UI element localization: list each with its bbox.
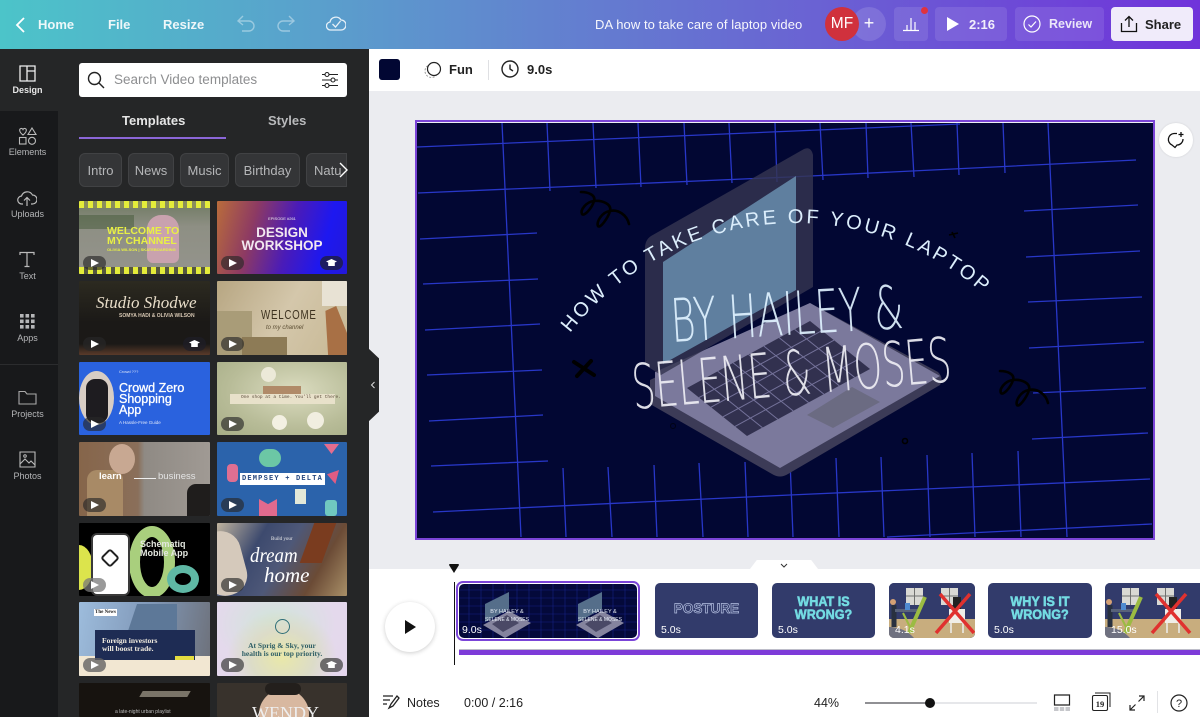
- credits line one: BY HAILEY &: [669, 273, 905, 357]
- clip duration: 15.0s: [1111, 624, 1137, 636]
- playhead line: [454, 582, 455, 665]
- template: foreign investors news: The News: [95, 610, 116, 615]
- tab: styles: Styles: [268, 113, 306, 128]
- search box: [79, 63, 347, 97]
- active tab underline: [79, 137, 226, 139]
- rail divider: [0, 364, 58, 365]
- share text: Share: [1145, 17, 1181, 32]
- animation name: Fun: [449, 62, 473, 77]
- icon: help: [1170, 694, 1188, 712]
- template: learn business: learn: [99, 471, 122, 482]
- icon: grid view: [1054, 694, 1070, 711]
- icon: clock: [501, 60, 519, 78]
- chip: music: Music: [188, 163, 221, 178]
- clip title: WRONG?: [795, 606, 852, 622]
- notes label: Notes: [407, 696, 440, 710]
- template side panel: [58, 49, 369, 717]
- left icon rail: [0, 49, 58, 717]
- template: studio shodwe: Studio Shodwe: [96, 293, 197, 312]
- home link: Home: [38, 17, 74, 32]
- chip: music: [180, 153, 229, 187]
- chip: nature: Natu: [314, 163, 341, 178]
- clip duration: 9.0s: [462, 624, 482, 636]
- squiggle top left: [581, 192, 629, 227]
- mini laptop left: SELENE & MOSES: [485, 617, 530, 623]
- icon: chip scroll chevron: [340, 162, 348, 178]
- icon: folder: [18, 391, 37, 404]
- file menu: File: [108, 17, 130, 32]
- small marks: [670, 232, 958, 444]
- timeline clip: intro selected: [456, 581, 640, 641]
- icon: check circle: [1023, 15, 1041, 33]
- template: welcome to my channel: MY CHANNEL: [107, 235, 177, 247]
- template: studio shodwe: SOMYA HADI & OLIVIA WILSON: [119, 313, 195, 319]
- template: learn business: [79, 442, 210, 516]
- icon: filter sliders: [322, 72, 338, 88]
- label: text: Text: [19, 271, 36, 281]
- mini laptop left: [483, 592, 531, 638]
- label: projects: Projects: [11, 409, 44, 419]
- icon: pages count: [1092, 692, 1110, 711]
- template: crowd zero shopping app: Shopping: [119, 392, 172, 406]
- label: design: Design: [12, 85, 42, 95]
- icon: uploads: [17, 191, 37, 206]
- nav: uploads: [11, 191, 44, 219]
- icon: expand tab: [750, 560, 818, 569]
- template: build your dream home: Build your: [271, 537, 293, 542]
- laptop screen: [663, 176, 796, 364]
- template: welcome to my channel: OLIVIA WILSON | SKATEBOARDING: [107, 247, 176, 252]
- clip duration: 5.0s: [778, 624, 798, 636]
- icon: photo: [19, 452, 36, 468]
- template: foreign investors news: [79, 602, 210, 676]
- zoom percent: 44%: [814, 696, 839, 710]
- icon: animation: [424, 62, 442, 78]
- template: build your dream home: dream: [250, 543, 298, 567]
- icon: apps grid: [20, 314, 35, 329]
- icon: play: [947, 17, 959, 31]
- template: foreign investors news: will boost trade.: [102, 644, 153, 653]
- nav: apps: [17, 314, 38, 343]
- template: learn business: business: [158, 471, 196, 482]
- chip: news: [128, 153, 174, 187]
- template: studio shodwe: [79, 281, 210, 355]
- icon: back chevron: [16, 17, 25, 33]
- button: review: [1015, 7, 1104, 41]
- avatar MF: [825, 7, 859, 41]
- clip title: [794, 593, 852, 622]
- chip: news: News: [135, 163, 167, 178]
- scene illustration: [1105, 583, 1200, 638]
- clip duration: 5.0s: [994, 624, 1014, 636]
- button: add collaborator: +: [864, 13, 874, 33]
- template: build your dream home: home: [264, 563, 310, 587]
- credits line two: SELENE & MOSES: [629, 324, 954, 424]
- timeline panel: [369, 569, 1200, 717]
- timeline clip: desk scene long: [1105, 583, 1200, 638]
- object options bar: [369, 49, 1200, 91]
- scene illustration: [889, 583, 975, 638]
- colour swatch: [379, 59, 400, 80]
- icon: collapse chevron: [370, 382, 375, 388]
- button: play duration: [935, 7, 1007, 41]
- icon: help: ?: [1176, 698, 1182, 710]
- mini laptop left: BY HAILEY &: [490, 609, 524, 615]
- laptop lid: [645, 148, 813, 375]
- chip: intro: [79, 153, 122, 187]
- template: schematiq mobile app: Schematiq: [140, 539, 186, 549]
- template: schematiq mobile app: [79, 523, 210, 596]
- illustration: isometric laptop: [645, 148, 942, 476]
- icon: comment plus: [1168, 132, 1184, 148]
- template: crowd zero shopping app: Crowd Zero: [119, 381, 184, 395]
- tab: templates: Templates: [122, 113, 185, 128]
- duration text: 2:16: [969, 17, 995, 32]
- timeline clip: posture: [655, 583, 758, 638]
- duration divider: [488, 60, 489, 80]
- template: welcome collage: WELCOME: [261, 307, 317, 322]
- toolbar divider: [1157, 691, 1158, 713]
- template: dempsey and delta: DEMPSEY + DELTA: [242, 475, 323, 483]
- chip: birthday: Birthday: [244, 163, 291, 178]
- chip: nature: [306, 153, 347, 187]
- chip: birthday: [235, 153, 300, 187]
- clip title: WHAT IS: [797, 593, 850, 609]
- mini laptop right: [576, 592, 624, 638]
- add comment button: [1159, 123, 1193, 157]
- icon: fullscreen: [1129, 695, 1145, 711]
- template: wendy partial: [217, 683, 347, 717]
- chip: intro: Intro: [87, 163, 114, 178]
- intro clip frames: [459, 584, 637, 638]
- icon: magnifier: [88, 72, 104, 88]
- clip title: [993, 595, 1087, 621]
- template: sprig and sky: health is our top priority.: [242, 649, 322, 658]
- slide: how to take care of your laptop: [417, 123, 1153, 538]
- document title: DA how to take care of laptop video: [595, 17, 802, 32]
- duration value: 9.0s: [527, 62, 552, 77]
- button: analytics: [894, 7, 928, 41]
- template: welcome to my channel: WELCOME TO: [107, 225, 179, 237]
- template: schematiq mobile app: Mobile App: [140, 548, 188, 558]
- template: daisies shop: One shop at a time. You'll get there.: [241, 395, 341, 400]
- curved heading: HOW TO TAKE CARE OF YOUR LAPTOP: [560, 209, 989, 332]
- template: dempsey and delta: [217, 442, 347, 516]
- icon: expand chevron: [780, 564, 788, 568]
- nav: photos: [13, 452, 42, 481]
- icon: elements: [18, 127, 37, 145]
- mini laptop right: BY HAILEY &: [583, 609, 617, 615]
- nav: text: [19, 252, 36, 281]
- template: crowd zero shopping app: [79, 362, 210, 435]
- progress bar: [459, 650, 1200, 655]
- template: design workshop: DESIGN: [256, 225, 308, 240]
- avatar MF: MF: [831, 15, 853, 32]
- laptop base: [650, 303, 942, 476]
- clip duration: 4.1s: [895, 624, 915, 636]
- icon: bars: [903, 18, 919, 32]
- icon: play triangle: [405, 620, 416, 634]
- template: daisies shop: [217, 362, 347, 435]
- slider fill: [865, 702, 930, 704]
- template: design workshop: EPISODE #261: [268, 216, 296, 221]
- nav: elements: [9, 127, 46, 157]
- trackpad: [807, 387, 880, 428]
- template: design workshop: [217, 201, 347, 274]
- mini laptop right: SELENE & MOSES: [578, 617, 623, 623]
- timeline clip: desk scene: [889, 583, 975, 638]
- label: photos: Photos: [13, 471, 42, 481]
- icon: notes: [383, 695, 400, 710]
- notification dot: [921, 7, 928, 14]
- review text: Review: [1049, 17, 1092, 31]
- icon: text T: [19, 252, 35, 268]
- search placeholder: Search Video templates: [114, 72, 257, 87]
- blue grid lines: [417, 123, 1152, 537]
- slider track: [865, 702, 1037, 704]
- slide canvas with selection border: [415, 120, 1155, 540]
- template: sprig and sky: At Sprig & Sky, your: [248, 641, 316, 650]
- template: dark partial: a late-night urban playlist: [115, 709, 171, 715]
- slider knob: [925, 698, 935, 708]
- cross mark: [574, 361, 594, 376]
- template: welcome to my channel: [79, 201, 210, 274]
- clip title: WRONG?: [1011, 606, 1069, 622]
- clip title: WHY IS IT: [1010, 593, 1070, 609]
- template: crowd zero shopping app: A Hassle-Free Guide: [119, 420, 161, 425]
- template: build your dream home: [217, 523, 347, 596]
- label: apps: Apps: [17, 333, 38, 343]
- panel collapse handle: [369, 349, 379, 421]
- template: design workshop: WORKSHOP: [242, 238, 322, 252]
- clip duration: 5.0s: [661, 624, 681, 636]
- template: dark partial: [79, 683, 210, 717]
- top toolbar: [0, 0, 1200, 49]
- timeline clip: why is it wrong: [988, 583, 1092, 638]
- time readout: 0:00 / 2:16: [464, 696, 523, 710]
- squiggle right: [1000, 371, 1048, 406]
- template: welcome collage: to my channel: [266, 325, 303, 331]
- clip title: POSTURE: [674, 601, 739, 616]
- icon: playhead marker: [449, 564, 459, 573]
- zoom slider: [865, 698, 1037, 708]
- template: welcome collage: [217, 281, 347, 355]
- icon: share: [1120, 16, 1138, 32]
- template: crowd zero shopping app: Crowd ???: [119, 369, 138, 374]
- nav: projects: [11, 391, 44, 419]
- template: crowd zero shopping app: App: [119, 403, 141, 417]
- timeline clip: what is wrong: [772, 583, 875, 638]
- icon: saved cloud: [326, 16, 346, 31]
- label: elements: Elements: [9, 147, 46, 157]
- template: foreign investors news: Foreign investors: [102, 636, 157, 645]
- icon: undo and redo: [237, 16, 295, 32]
- template: sprig and sky: [217, 602, 347, 676]
- button: share: [1111, 7, 1193, 41]
- button: add collaborator: [852, 7, 886, 41]
- design tab active: [0, 49, 58, 111]
- icon: design: [19, 65, 36, 82]
- resize menu: Resize: [163, 17, 204, 32]
- play button: [385, 602, 435, 652]
- label: uploads: Uploads: [11, 209, 44, 219]
- keyboard: [687, 321, 870, 436]
- icon: pages count: 19: [1096, 699, 1104, 709]
